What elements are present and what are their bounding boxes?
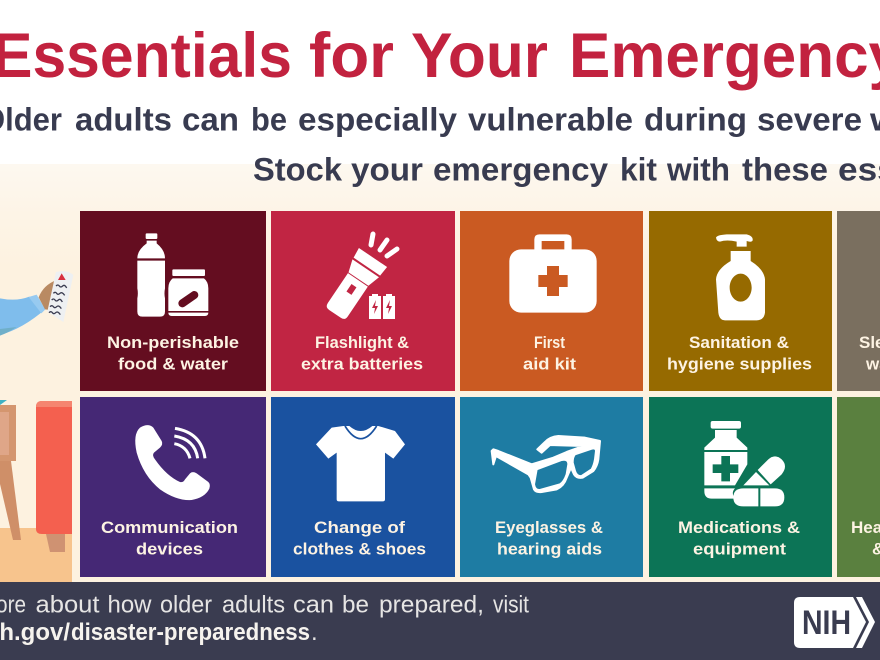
label: food & water <box>118 354 228 374</box>
icon: t-shirt <box>316 426 405 501</box>
footer text: disaster-preparedness <box>71 619 310 646</box>
label <box>301 333 423 374</box>
panel: sleeping bag, clipped <box>837 211 880 391</box>
illustration: room with person's arm <box>0 271 73 582</box>
instruction line: Stock <box>253 152 343 188</box>
label: hearing aids <box>497 540 602 558</box>
footer text: about <box>36 592 100 619</box>
instruction line <box>253 152 880 188</box>
icon: flashlight <box>321 234 397 323</box>
icon: side table <box>0 400 21 540</box>
footer bar <box>0 582 880 660</box>
label <box>859 333 880 374</box>
footer text: adults <box>222 592 285 619</box>
panel: change of clothes <box>271 397 455 577</box>
panel: eyeglasses and hearing aids <box>460 397 643 577</box>
cream background <box>0 164 880 584</box>
panel: flashlight and batteries <box>271 211 455 391</box>
label: First <box>534 333 565 352</box>
NIH logo: NIH <box>802 604 851 642</box>
instruction line: your <box>351 152 423 188</box>
label: Medications & <box>678 518 800 537</box>
footer text: . <box>311 619 318 646</box>
icon: first aid case <box>509 234 597 313</box>
subtitle: especially <box>298 102 457 138</box>
subtitle: adults <box>75 102 172 138</box>
icon: medicine bottle and pills <box>704 421 785 506</box>
label <box>293 518 426 558</box>
label <box>101 518 238 558</box>
footer text: be <box>342 592 369 619</box>
label <box>678 518 800 558</box>
footer text: can <box>293 592 334 619</box>
label: aid kit <box>523 354 576 374</box>
footer text: visit <box>493 592 529 619</box>
label: clothes & shoes <box>293 540 426 558</box>
panel: first aid kit <box>460 211 643 391</box>
icon: eyeglasses <box>492 436 600 492</box>
label: extra batteries <box>301 354 423 374</box>
icon: arm holding alert paper <box>0 271 73 336</box>
label <box>495 518 603 558</box>
subtitle: vulnerable <box>468 102 633 138</box>
footer text: how <box>108 592 152 619</box>
label: devices <box>136 540 203 558</box>
NIH logo <box>794 597 875 648</box>
subtitle: during <box>644 102 747 138</box>
label <box>107 333 239 374</box>
icon: water bottle and jar <box>137 233 208 317</box>
label: Communication <box>101 518 238 537</box>
title: for <box>309 21 394 91</box>
title <box>0 21 880 91</box>
label <box>523 333 576 374</box>
footer text <box>0 592 529 646</box>
panel: non-perishable food and water <box>80 211 266 391</box>
label: Sanitation & <box>689 333 789 352</box>
subtitle: be <box>251 102 287 138</box>
label <box>851 518 880 558</box>
panel: communication devices <box>80 397 266 577</box>
panel: medications and equipment <box>649 397 832 577</box>
icon: red armchair <box>36 401 72 552</box>
icon: phone with signal <box>135 425 210 500</box>
label <box>667 333 812 374</box>
instruction line: kit <box>620 152 657 188</box>
panel: sanitation and hygiene <box>649 211 832 391</box>
icon: pump bottle <box>716 234 765 320</box>
footer text: older <box>160 592 212 619</box>
subtitle: severe <box>757 102 862 138</box>
label: Non-perishable <box>107 333 239 352</box>
instruction line: emergency <box>433 152 608 188</box>
footer text: prepared, <box>379 592 484 619</box>
subtitle: can <box>182 102 239 138</box>
label: Change of <box>314 518 405 537</box>
instruction line: with <box>666 152 730 188</box>
label: equipment <box>693 540 786 558</box>
panel: health items, clipped <box>837 397 880 577</box>
label: hygiene supplies <box>667 354 812 374</box>
label: Eyeglasses & <box>495 518 603 537</box>
label: Flashlight & <box>315 333 409 352</box>
instruction line: these <box>742 152 828 188</box>
subtitle <box>0 102 880 138</box>
title: Essentials <box>0 21 292 91</box>
title: Your <box>411 21 548 91</box>
